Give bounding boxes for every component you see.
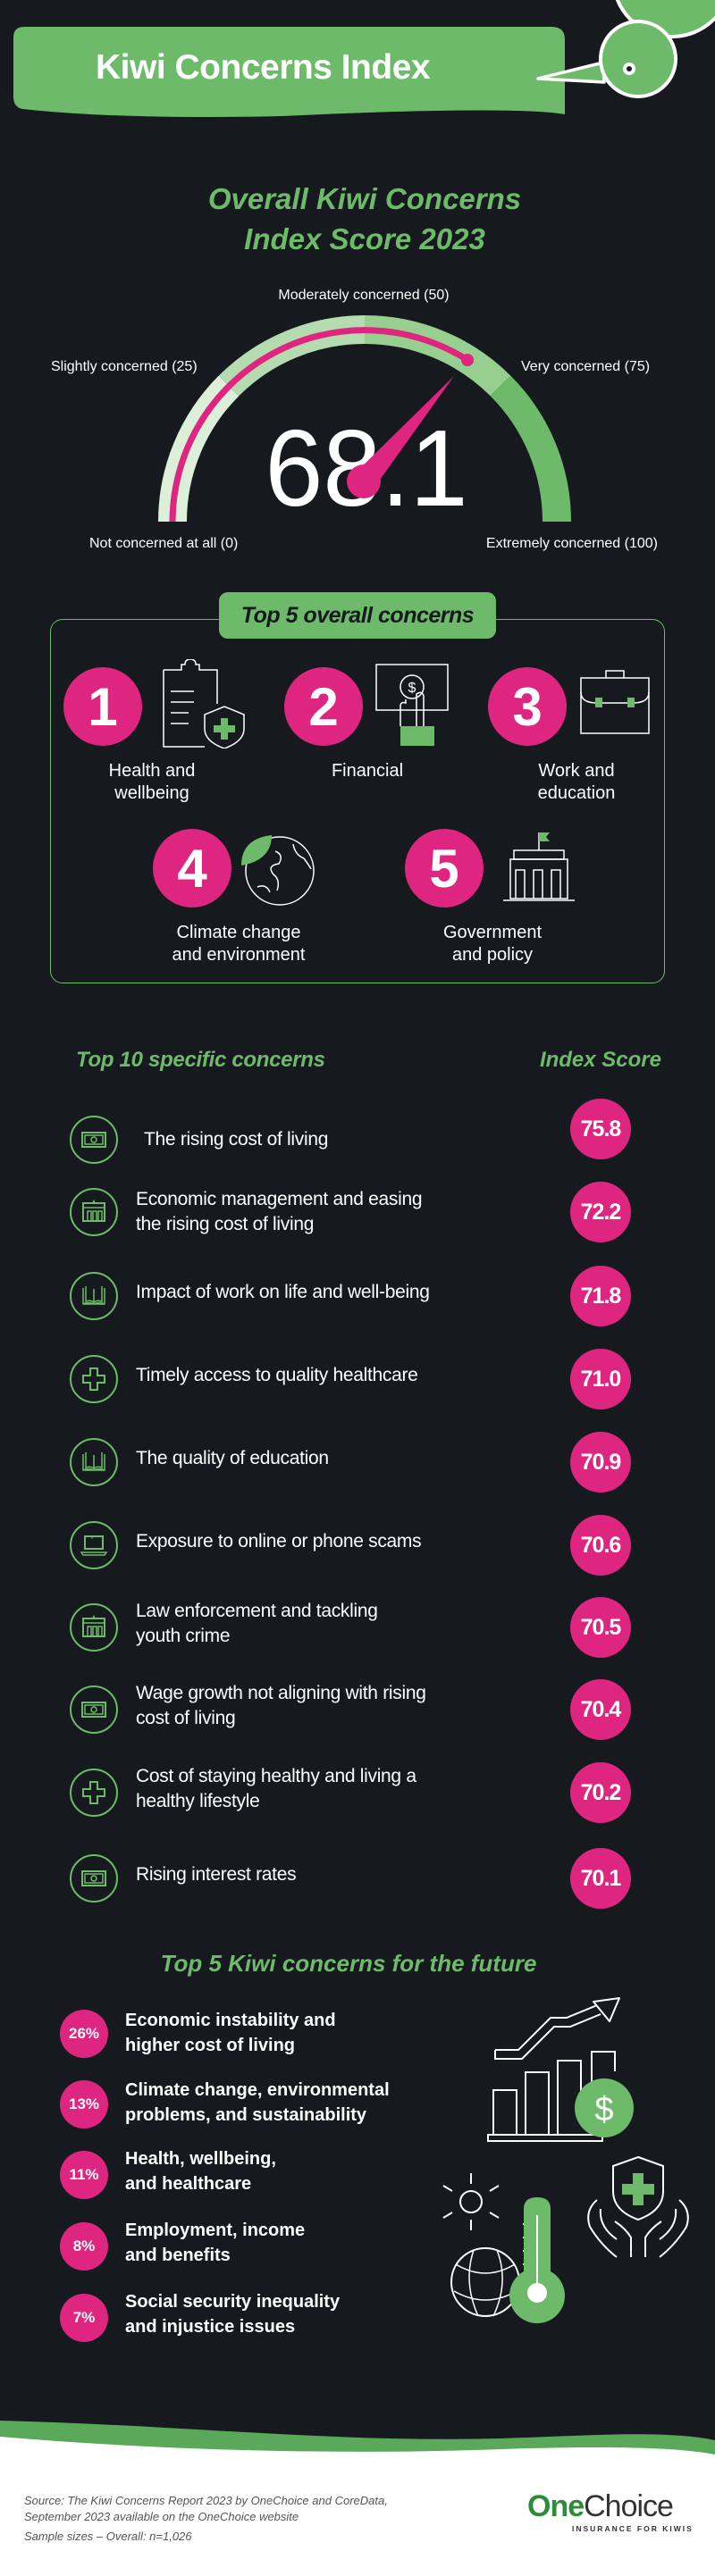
concern row 6: 70.6	[581, 1533, 620, 1558]
future concern 5: Social security inequality	[125, 2292, 340, 2312]
future concern 1: 26%	[69, 2025, 99, 2042]
gauge chart	[51, 288, 658, 551]
concern 2	[284, 664, 449, 781]
source note: Sample sizes – Overall: n=1,026	[24, 2530, 192, 2543]
label: Work and	[538, 761, 615, 781]
icon: money in hand	[375, 664, 449, 746]
concern row 7	[70, 1597, 631, 1658]
title banner	[13, 27, 565, 117]
heading: future concerns: Top 5 Kiwi concerns for the future	[161, 1950, 536, 1977]
concern row 2: Economic management and easing	[136, 1189, 422, 1209]
future concern 1: higher cost of living	[125, 2036, 295, 2055]
concern row 7: youth crime	[136, 1626, 230, 1646]
future concern 3: Health, wellbeing,	[125, 2149, 276, 2169]
label: and environment	[172, 945, 305, 965]
concern 3	[488, 667, 650, 803]
gauge chart: Slightly concerned (25)	[51, 359, 198, 374]
concern row 4	[70, 1349, 631, 1409]
concern row 8: 70.4	[581, 1697, 620, 1722]
heading: overall score: Index Score 2023	[244, 222, 485, 255]
concern row 1	[70, 1099, 631, 1164]
concern row 7: 70.5	[581, 1615, 620, 1640]
future concern 4: and benefits	[125, 2246, 231, 2265]
panel heading pill: Top 5 overall concerns	[241, 602, 474, 627]
concern 3: 3	[512, 677, 543, 736]
concern row 10: 70.1	[581, 1865, 620, 1890]
concern row 7: Law enforcement and tackling	[136, 1601, 378, 1621]
concern row 5	[70, 1432, 631, 1493]
future concern 5: and injustice issues	[125, 2317, 295, 2337]
gauge chart: Moderately concerned (50)	[278, 288, 450, 303]
future concern 5: 7%	[73, 2309, 95, 2326]
icon: globe thermometer sun	[443, 2173, 565, 2324]
future concern 2: problems, and sustainability	[125, 2105, 366, 2125]
concern row 2	[70, 1182, 631, 1242]
icon: growth chart with dollar: $	[594, 2091, 614, 2129]
concern 4	[153, 829, 315, 965]
concern row 1: The rising cost of living	[144, 1129, 328, 1150]
concern 2: 2	[308, 677, 339, 736]
heading: top 10 specific concerns: Top 10 specific concerns	[76, 1048, 325, 1072]
label: and policy	[452, 945, 533, 965]
future concern 3	[60, 2149, 276, 2199]
future concern 4: 8%	[73, 2237, 95, 2254]
concern row 6: Exposure to online or phone scams	[136, 1531, 421, 1551]
source note: September 2023 available on the OneChoice website	[24, 2510, 299, 2523]
concern row 8: Wage growth not aligning with rising	[136, 1683, 426, 1703]
concern row 5: The quality of education	[136, 1448, 329, 1468]
concern row 4: Timely access to quality healthcare	[136, 1365, 418, 1385]
logo: OneChoice	[527, 2489, 694, 2533]
heading: overall score: Overall Kiwi Concerns	[208, 182, 521, 215]
future concern 4: Employment, income	[125, 2221, 305, 2240]
concern row 2: the rising cost of living	[136, 1214, 314, 1234]
heading: index score: Index Score	[540, 1048, 661, 1072]
concern row 10	[70, 1848, 631, 1909]
gauge chart: Extremely concerned (100)	[486, 536, 658, 551]
future concern 3: 11%	[69, 2166, 99, 2183]
concern row 5: 70.9	[581, 1449, 620, 1474]
concern 4: 4	[177, 838, 207, 899]
icon: hands with shield	[587, 2156, 689, 2258]
icon: globe leaf	[241, 835, 315, 906]
future concern 5	[60, 2292, 340, 2342]
gauge chart: Not concerned at all (0)	[89, 536, 238, 551]
concern row 3: Impact of work on life and well-being	[136, 1282, 430, 1302]
future concern 2	[60, 2080, 390, 2129]
label	[109, 761, 195, 803]
concern row 2: 72.2	[581, 1199, 620, 1224]
icon: briefcase	[580, 670, 650, 734]
heading: overall score	[208, 182, 521, 255]
label: Health and	[109, 761, 195, 781]
logo: OneChoice: INSURANCE FOR KIWIS	[572, 2524, 694, 2533]
footer wave	[0, 2421, 715, 2576]
concern row 9: Cost of staying healthy and living a	[136, 1766, 416, 1786]
concern row 8: cost of living	[136, 1708, 235, 1728]
label	[172, 923, 306, 965]
label: education	[538, 783, 615, 803]
icon: kiwi head	[536, 0, 715, 98]
future concern 1	[60, 2010, 336, 2058]
concern row 8	[70, 1679, 631, 1740]
future concern 2: Climate change, environmental	[125, 2080, 390, 2100]
future concern 2: 13%	[69, 2095, 99, 2112]
label: Government	[443, 923, 542, 942]
gauge chart: 68.1	[265, 407, 468, 529]
label	[538, 761, 615, 803]
concern row 3	[70, 1266, 631, 1326]
panel heading pill	[219, 592, 496, 639]
concern 5: 5	[429, 838, 459, 899]
concern row 1: 75.8	[581, 1117, 620, 1142]
future concern 1: Economic instability and	[125, 2011, 336, 2030]
title text: Kiwi Concerns Index	[96, 48, 430, 87]
label: wellbeing	[114, 783, 189, 803]
label: Climate change	[177, 923, 300, 942]
icon: money in hand: $	[408, 681, 416, 696]
future concern 4	[60, 2221, 305, 2271]
source note: Source: The Kiwi Concerns Report 2023 by OneChoice and CoreData,	[24, 2494, 388, 2507]
concern row 3: 71.8	[581, 1283, 620, 1308]
icon: clipboard shield	[163, 659, 245, 749]
concern row 9	[70, 1762, 631, 1823]
concern row 9: 70.2	[581, 1779, 620, 1804]
label	[443, 923, 542, 965]
concern row 4: 71.0	[581, 1367, 620, 1392]
source note	[24, 2494, 388, 2543]
concern 1	[63, 659, 245, 803]
future concern 3: and healthcare	[125, 2174, 251, 2194]
concern row 9: healthy lifestyle	[136, 1791, 259, 1811]
gauge chart: Very concerned (75)	[521, 359, 650, 374]
icon: growth chart with dollar	[487, 1997, 634, 2142]
concern 1: 1	[88, 677, 118, 736]
concern row 6	[70, 1515, 631, 1576]
concern row 10: Rising interest rates	[136, 1864, 296, 1885]
logo: OneChoice: OneChoice	[527, 2489, 673, 2523]
label: Financial	[332, 761, 403, 781]
icon: government building	[503, 832, 575, 901]
panel: top 5 overall concerns	[50, 619, 665, 983]
concern 5	[405, 829, 575, 965]
